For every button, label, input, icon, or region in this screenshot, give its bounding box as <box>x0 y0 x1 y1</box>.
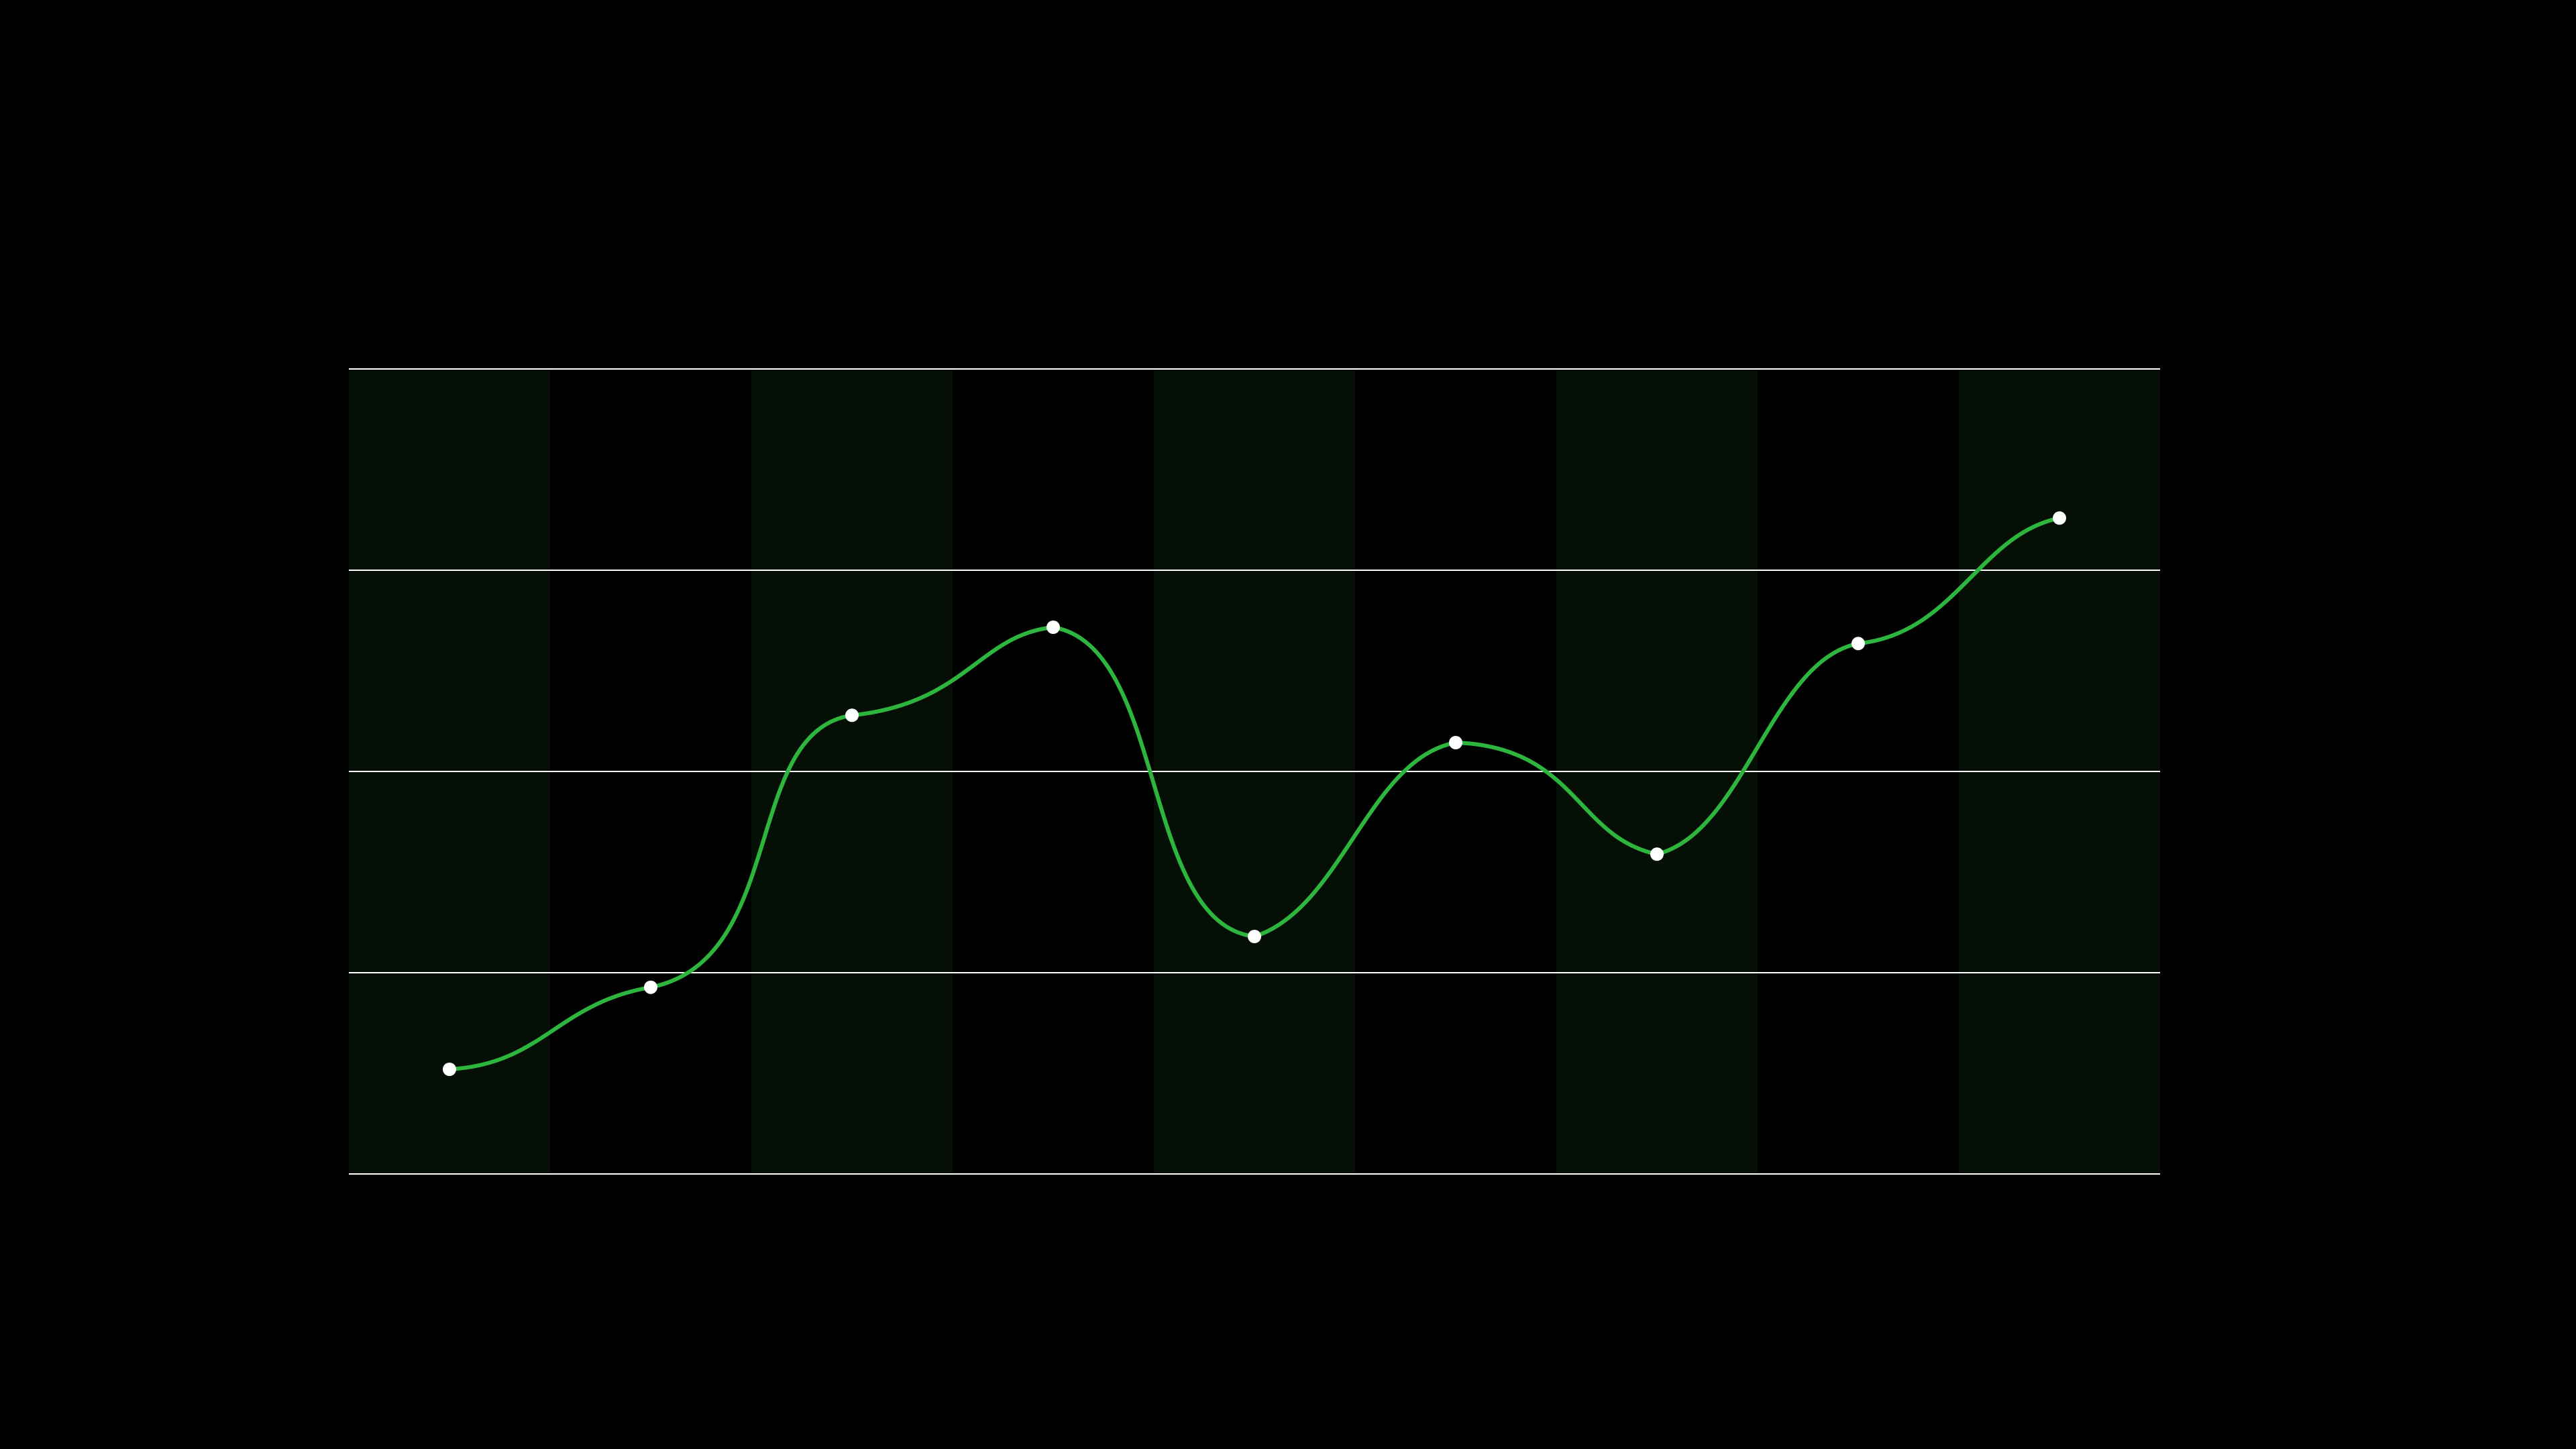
data point markers <box>443 511 2066 1076</box>
horizontal grid lines <box>349 369 2160 1174</box>
alternating column bands <box>349 369 2160 1174</box>
green data line <box>449 518 2059 1069</box>
